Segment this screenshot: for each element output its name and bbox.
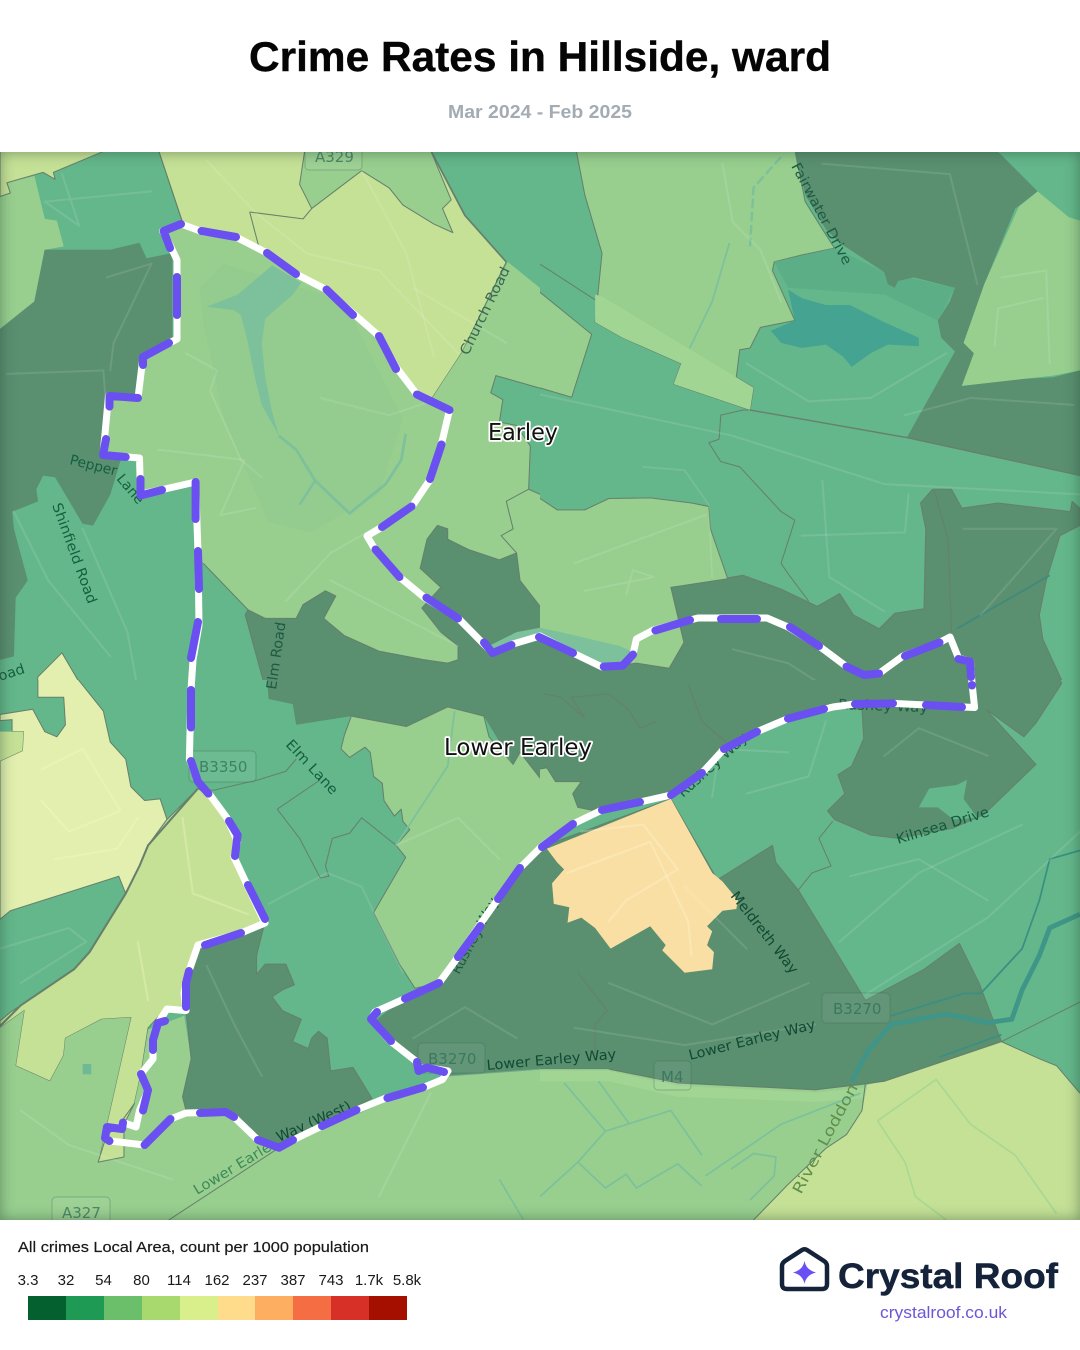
legend scale values: 54 (95, 1272, 112, 1289)
road labels (0, 160, 991, 1198)
legend scale values: 32 (58, 1272, 74, 1289)
logo: Crystal Roof (780, 1247, 1058, 1322)
road shield: B3270 west (418, 1043, 485, 1073)
road shield: B3350: B3350 (199, 758, 247, 776)
road shield: A329 (305, 140, 362, 170)
road label: Rushey Way east: Rushey Way (838, 697, 928, 716)
map area: south-west quadrant (0, 680, 540, 1220)
place label: Earley: Earley (488, 420, 558, 446)
legend colour scale (28, 1296, 407, 1320)
road label: Fairwater Drive: Fairwater Drive (787, 160, 855, 268)
road label: Elm Lane: Elm Lane (282, 737, 341, 798)
road label: Shinfield Road: Shinfield Road (48, 501, 100, 606)
map area: north-west quadrant (0, 152, 540, 680)
road shield: B3350 (189, 751, 256, 782)
website link text: crystalroof.co.uk (880, 1304, 1008, 1322)
water label: River Loddon: River Loddon (789, 1081, 862, 1197)
road label: Lower Earle: Lower Earle (191, 1139, 274, 1198)
legend scale values: 80 (133, 1272, 150, 1289)
legend scale values: 3.3 (18, 1272, 38, 1289)
road label: Lane: Lane (113, 471, 147, 508)
road label: Way (West): Way (West) (274, 1098, 354, 1146)
logo wordmark: Crystal Roof (838, 1257, 1058, 1296)
legend (18, 1239, 422, 1320)
ward boundary: Hillside (103, 224, 975, 1148)
legend scale values: 387 (280, 1272, 306, 1289)
place label: Lower Earley: Lower Earley (444, 735, 592, 761)
panel: choropleth map (0, 152, 1080, 1220)
road label: Lower Earley Way east: Lower Earley Way (687, 1017, 817, 1064)
road label: Lower Earley Way middle: Lower Earley Way (486, 1047, 617, 1074)
road label: Pepper: Pepper (68, 452, 119, 480)
legend scale values: 743 (318, 1272, 344, 1289)
road shield: B3270 east (822, 993, 890, 1023)
legend scale values: 114 (167, 1272, 191, 1289)
legend scale values: 1.7k (355, 1272, 384, 1289)
map area: south-east quadrant (540, 680, 1080, 1220)
road label: Church Road: Church Road (457, 264, 514, 358)
road label: Rushey Way north: Rushey Way (675, 730, 751, 801)
legend scale values: 5.8k (393, 1272, 422, 1289)
subtitle: date range: Mar 2024 - Feb 2025 (448, 101, 632, 122)
map edge vignette (0, 152, 1080, 1220)
road shield: M4 (654, 1061, 691, 1090)
road label: Elm Road: Elm Road (264, 621, 289, 691)
road label: Rushey Way south: Rushey Way (448, 895, 502, 977)
road shield: M4: M4 (661, 1068, 684, 1086)
legend scale values (18, 1272, 422, 1289)
road shield: B3270 east: B3270 (833, 1000, 881, 1018)
title: Crime Rates in Hillside, ward (249, 33, 831, 80)
icon: house with star (782, 1249, 827, 1289)
road label: Meldreth Way: Meldreth Way (727, 889, 801, 977)
road shield: A327 (52, 1197, 110, 1227)
road shield: B3270 west: B3270 (428, 1050, 476, 1068)
road label: Kilnsea Drive: Kilnsea Drive (894, 804, 991, 848)
map area: north-east quadrant (540, 152, 1080, 680)
legend scale values: 237 (242, 1272, 268, 1289)
legend scale values: 162 (204, 1272, 230, 1289)
legend title: All crimes Local Area, count per 1000 population (18, 1239, 369, 1256)
